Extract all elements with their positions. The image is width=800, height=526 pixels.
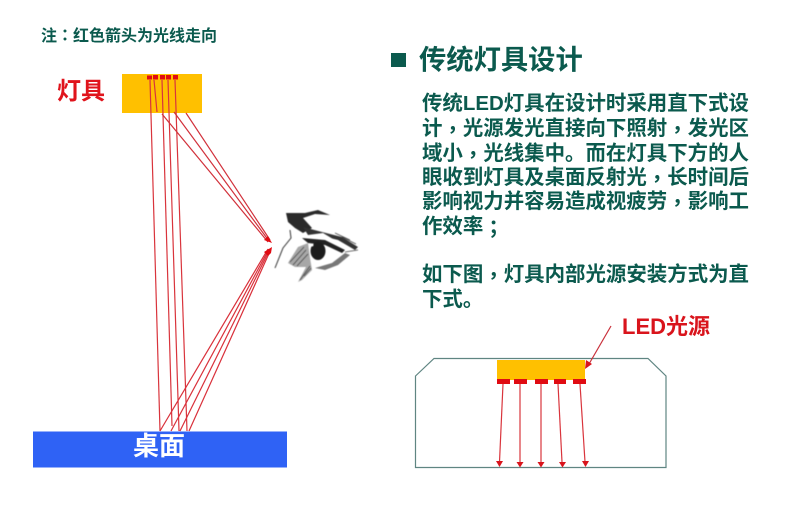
label: luminaire: 灯具 xyxy=(57,78,105,105)
description text: 影响视力并容易造成视疲劳，影响工 xyxy=(422,186,749,216)
arrowheads at the eye xyxy=(264,236,272,256)
pointer arrow to light source xyxy=(585,326,611,369)
description text: 眼收到灯具及桌面反射光，长时间后 xyxy=(422,162,749,192)
description text: 传统LED灯具在设计时采用直下式设 xyxy=(422,92,749,115)
description text: 计，光源发光直接向下照射，发光区 xyxy=(422,113,749,143)
note: red arrows show light direction: 注：红色箭头为光线走向 xyxy=(41,22,217,46)
downward light rays xyxy=(150,80,187,431)
LED chips xyxy=(497,379,586,384)
heading: 传统灯具设计 xyxy=(419,44,583,75)
ray arrowheads xyxy=(496,461,589,468)
lamp body xyxy=(122,74,202,113)
description text: 作效率； xyxy=(422,211,504,241)
rays reflected from lamp to eye xyxy=(162,112,270,242)
desk surface xyxy=(33,432,287,468)
heading bullet xyxy=(391,53,406,67)
desk label: 桌面 xyxy=(133,431,185,461)
light source body xyxy=(497,360,585,380)
light rays xyxy=(500,384,585,462)
description text: 如下图，灯具内部光源安装方式为直 xyxy=(422,259,749,289)
description text: 下式。 xyxy=(422,288,483,311)
LED row in lamp xyxy=(147,75,178,80)
description text: 域小，光线集中。而在灯具下方的人 xyxy=(422,138,749,168)
fixture housing xyxy=(416,358,666,468)
description text xyxy=(422,92,749,311)
rays reflected from desk to eye xyxy=(160,249,271,431)
label: LED light source: LED光源 xyxy=(622,314,710,339)
icon: eye sketch xyxy=(275,210,358,282)
